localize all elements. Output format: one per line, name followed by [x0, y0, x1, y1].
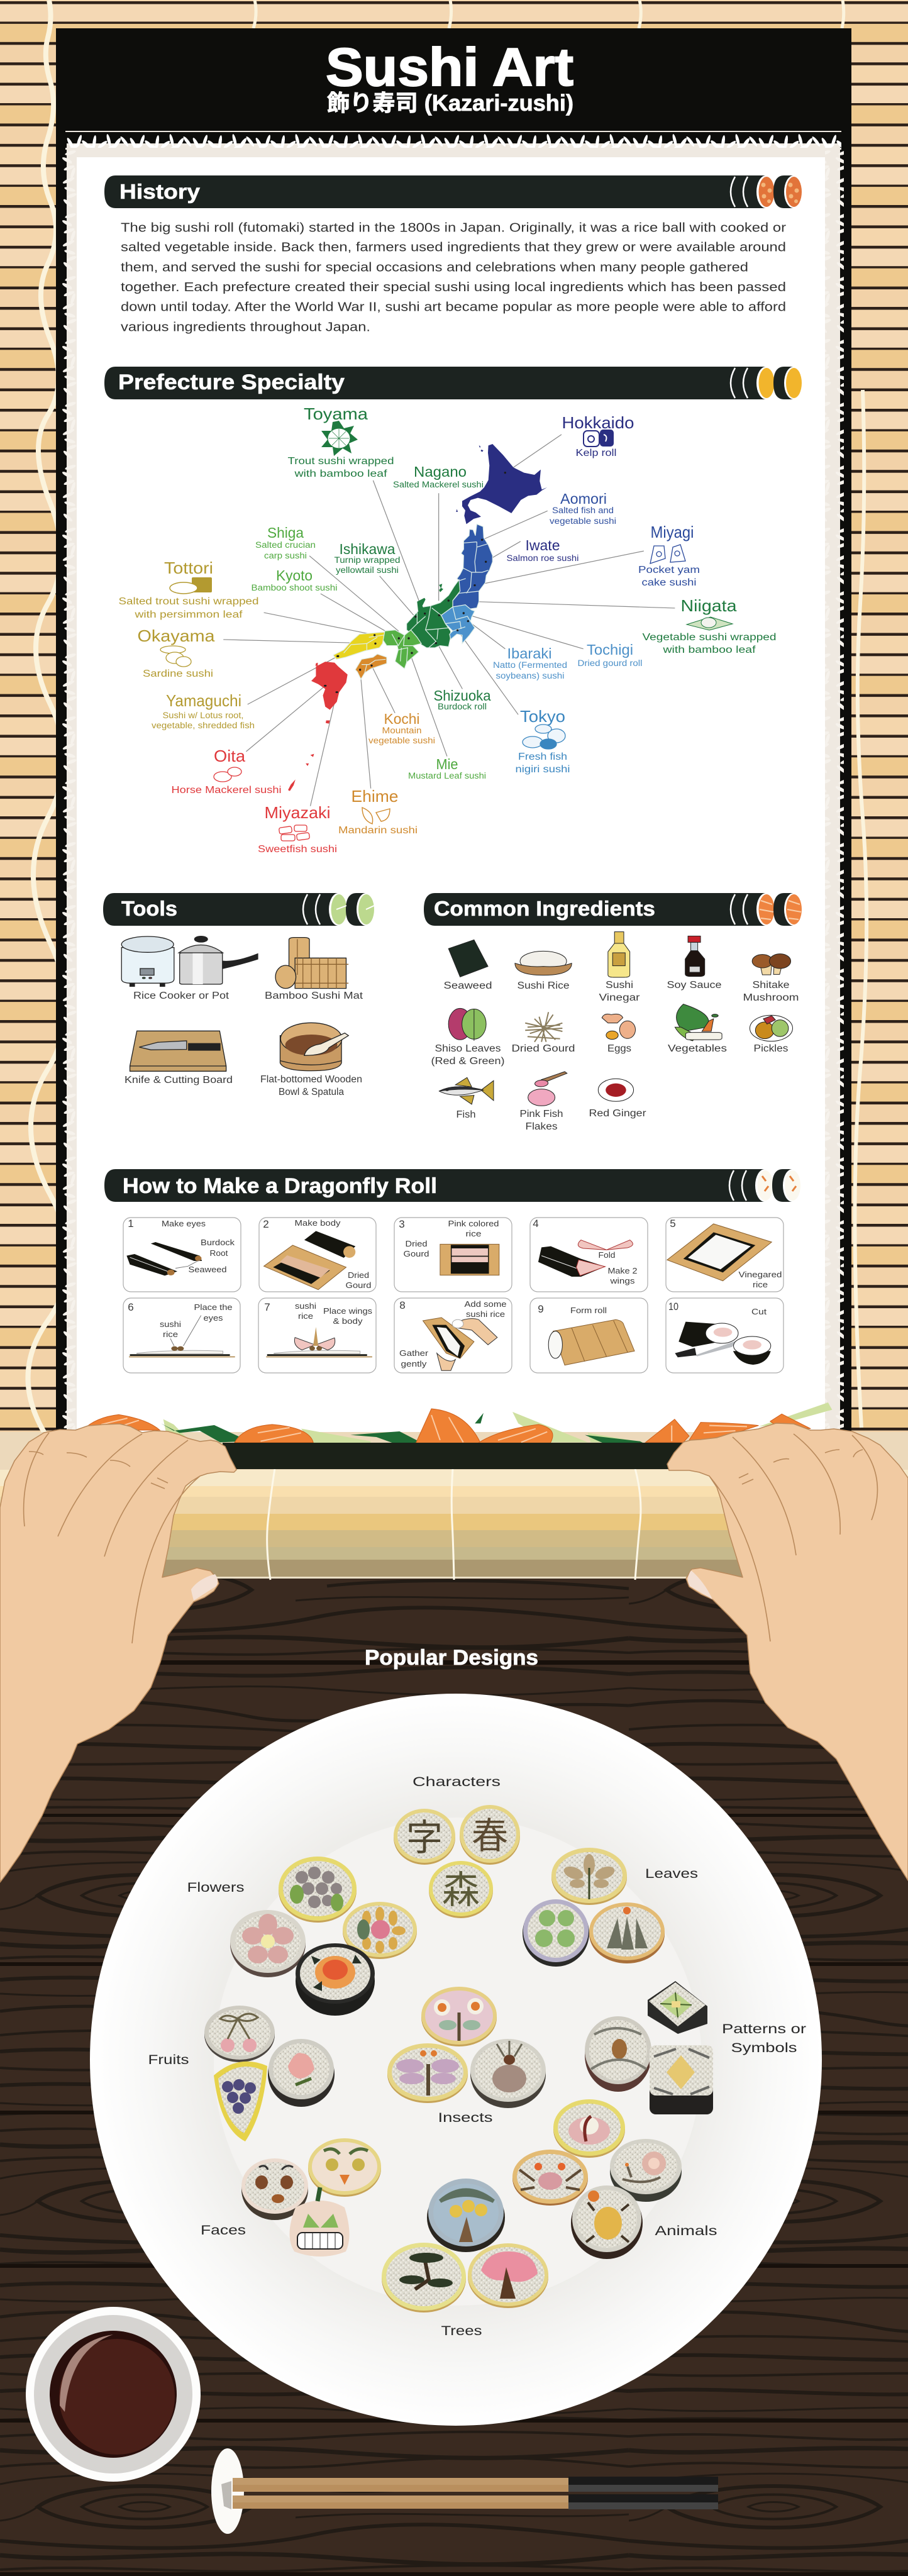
text block: ingredient labels: Soy Sauce [667, 980, 722, 991]
callout: Toyama: with bamboo leaf [294, 469, 387, 479]
callout: Ehime [338, 787, 418, 836]
sushi: characters group: 森 [442, 1860, 480, 1914]
sushi: fruits group [204, 2006, 335, 2141]
callout: Okayama: Okayama [137, 626, 215, 645]
text block: history: them, and served the sushi for special occasions and celebrations when many people gathered [121, 260, 748, 274]
callout: Shizuoka: Burdock roll [438, 702, 487, 711]
step 5: Vinegared [738, 1270, 782, 1279]
step 2: 2 [263, 1218, 269, 1230]
callout: Ibaraki: Natto (Fermented [493, 660, 567, 670]
callout: Toyama: Trout sushi wrapped [288, 456, 394, 467]
callout: Tokyo [516, 707, 570, 775]
heading: History [104, 175, 803, 208]
callout: Ishikawa: Ishikawa [340, 541, 396, 557]
step 9: 9 [538, 1303, 544, 1315]
step 6: sushi [160, 1319, 181, 1329]
step 8: sushi rice [466, 1309, 505, 1319]
text block: ingredient labels: Red Ginger [589, 1108, 646, 1119]
callout: Miyagi: cake sushi [641, 577, 697, 588]
callout: Oita: Horse Mackerel sushi [171, 785, 282, 796]
text block: ingredient labels: Shiso Leaves [435, 1043, 501, 1054]
callout: Aomori: Aomori [560, 491, 607, 507]
step 9 [530, 1298, 648, 1373]
sushi: faces group [241, 2138, 381, 2257]
callout: Okayama [137, 626, 215, 679]
callout: Ishikawa [335, 541, 400, 575]
labels: plate categories: Characters [412, 1775, 501, 1789]
step 4: Fold [599, 1250, 615, 1260]
callout: Toyama [288, 404, 394, 479]
labels: plate categories: Trees [441, 2324, 482, 2338]
text block: ingredient labels: Shitake [752, 980, 790, 991]
step 10: Cut [751, 1307, 767, 1316]
callout: Kochi: vegetable sushi [368, 736, 435, 745]
map: Japan [333, 444, 547, 679]
icon: soy sauce bottle [685, 936, 705, 977]
heading: How to Make a Dragonfly Roll [104, 1169, 802, 1202]
step 7: sushi [295, 1301, 316, 1311]
text block: ingredient labels: Eggs [607, 1043, 631, 1054]
step 4: 4 [533, 1218, 539, 1230]
text block: ingredient labels: Mushroom [743, 992, 799, 1003]
step 7: 7 [264, 1301, 270, 1313]
step 3: 3 [399, 1218, 405, 1230]
callout: Hokkaido: Hokkaido [562, 413, 634, 432]
callout: Kyoto: Bamboo shoot sushi [252, 583, 337, 592]
callout: Nagano: Nagano [414, 464, 467, 480]
callout: Miyagi: Pocket yam [638, 565, 700, 575]
labels: plate categories: Flowers [187, 1880, 244, 1895]
text block: tool labels: Bowl & Spatula [279, 1087, 344, 1097]
callout: Tottori: Salted trout sushi wrapped [118, 596, 259, 607]
callout: Shizuoka [434, 687, 491, 711]
plate [90, 1694, 822, 2426]
text block: history: salted vegetable inside. Back then, farmers used ingredients that they grew or were available around [121, 240, 786, 254]
callout: Mie [408, 756, 486, 780]
callout: Kyoto [252, 567, 337, 592]
callout: Ibaraki: Ibaraki [507, 645, 552, 662]
nori band [223, 1443, 685, 1469]
heading: Prefecture Specialty: Prefecture Specialty [118, 370, 345, 394]
step 6: rice [163, 1330, 178, 1339]
labels: plate categories: Symbols [731, 2041, 797, 2055]
heading: Common Ingredients: Common Ingredients [434, 897, 655, 920]
callout: Aomori: vegetable sushi [550, 516, 616, 526]
step 1: Make eyes [162, 1219, 206, 1228]
text block: ingredient labels: Sushi [606, 980, 633, 991]
icon: shitake mushroom [752, 954, 791, 975]
step 8: gently [401, 1359, 427, 1368]
callout: Yamaguchi: vegetable, shredded fish [152, 721, 255, 730]
chopstick rest and chopsticks [211, 2448, 718, 2534]
step 3: Pink colored [448, 1219, 499, 1228]
callout: Tokyo: Tokyo [520, 707, 565, 726]
text block: ingredient labels: Vinegar [599, 992, 640, 1003]
step 2 [259, 1218, 376, 1292]
callout: Shiga: carp sushi [264, 551, 307, 560]
callout: Okayama: Sardine sushi [143, 669, 213, 679]
callout: Kochi [368, 711, 435, 745]
icon: wooden bowl and spatula [280, 1023, 348, 1071]
callout: Miyazaki: Sweetfish sushi [258, 844, 337, 855]
labels: plate categories: Patterns or [722, 2022, 806, 2036]
step 4: wings [609, 1276, 635, 1285]
hand: right [667, 1423, 908, 1880]
callout: Toyama: Toyama [304, 404, 368, 423]
icon: eggs [602, 1014, 636, 1040]
callout: Ibaraki [493, 645, 567, 680]
step 7: & body [333, 1316, 363, 1326]
step 3: Dried [405, 1239, 428, 1248]
text block: ingredient labels: Fish [457, 1109, 475, 1120]
callout: Iwate: Salmon roe sushi [507, 553, 579, 563]
heading: Tools [103, 893, 375, 926]
panel: black nori sheet [56, 28, 851, 1432]
callout: Iwate: Iwate [526, 537, 560, 553]
sushi: leaves group [523, 1848, 665, 1967]
heading: How to Make a Dragonfly Roll: How to Make a Dragonfly Roll [123, 1174, 437, 1198]
text block: tool labels: Flat-bottomed Wooden [260, 1074, 362, 1085]
callout: Hokkaido: Kelp roll [576, 448, 616, 458]
step 2: Gourd [346, 1280, 371, 1290]
step 1: Seaweed [189, 1265, 226, 1274]
sushi: insects group [387, 1987, 546, 2108]
sushi: characters group: 春 [472, 1806, 508, 1859]
text block: history: together. Each prefecture created their special sushi using local ingredients which has been passed [121, 280, 786, 294]
step 3 [394, 1218, 512, 1292]
callout: Ehime: Ehime [351, 787, 399, 806]
text block: history: The big sushi roll (futomaki) started in the 1800s in Japan. Originally, it was a rice ball with cooked or [121, 221, 786, 235]
step 10: 10 [668, 1301, 678, 1313]
callout: Iwate [507, 537, 579, 563]
icon: red ginger [598, 1079, 634, 1101]
callout: Mie: Mie [436, 756, 458, 772]
step 8: Add some [464, 1299, 507, 1309]
step 9: Form roll [570, 1306, 607, 1315]
callout: Niigata: Vegetable sushi wrapped [643, 632, 776, 643]
rolled mat [0, 1432, 908, 1580]
callout: Shiga: Shiga [267, 525, 304, 541]
icons: ingredients [439, 932, 792, 1106]
callout: Ishikawa: yellowtail sushi [336, 565, 399, 575]
callout: Yamaguchi: Sushi w/ Lotus root, [162, 711, 244, 720]
text block: ingredient labels: Pink Fish [519, 1109, 563, 1119]
map: connector lines [223, 435, 675, 806]
step 7: Place wings [323, 1306, 373, 1316]
callout: Tottori [118, 558, 259, 620]
icon: vegetables [675, 1004, 722, 1041]
step 1: Burdock [201, 1238, 235, 1247]
icon: pot [179, 936, 258, 984]
text block: ingredient labels: Flakes [526, 1121, 558, 1132]
text block: ingredient labels: Seaweed [444, 980, 492, 991]
callout: Ishikawa: Turnip wrapped [335, 555, 400, 565]
step 4: Make 2 [607, 1266, 638, 1275]
icon: shiso leaves [448, 1008, 486, 1041]
wooden table [0, 1579, 908, 2576]
step 6: eyes [204, 1313, 223, 1323]
callout: Kyoto: Kyoto [276, 567, 313, 584]
callout: Tochigi: Dried gourd roll [577, 658, 643, 668]
callout: Miyazaki: Miyazaki [264, 803, 331, 822]
callout: Nagano [393, 464, 484, 489]
salmon and greens [83, 1402, 832, 1444]
heading: Common Ingredients [424, 893, 803, 926]
callout: Shiga [255, 525, 316, 560]
icon: bamboo mat [275, 938, 348, 989]
labels: plate categories: Insects [438, 2111, 493, 2125]
heading: Prefecture Specialty [104, 367, 803, 399]
icons: tools [121, 936, 348, 1071]
sushi: patterns group [585, 1981, 713, 2114]
hand: left [0, 1424, 236, 1882]
callout: Tokyo: nigiri sushi [516, 764, 570, 775]
callout: Aomori [550, 491, 616, 526]
callout: Yamaguchi: Yamaguchi [166, 691, 241, 710]
text block: tool labels: Bamboo Sushi Mat [265, 991, 363, 1001]
step 7 [258, 1298, 376, 1373]
labels: plate categories: Faces [201, 2223, 246, 2238]
panel: steps [123, 1218, 783, 1373]
icon: seaweed [448, 940, 488, 977]
text block: history: various ingredients throughout Japan. [121, 321, 370, 335]
labels: plate categories: Animals [655, 2224, 717, 2238]
icon: sushi rice [515, 951, 572, 975]
soy sauce dish [26, 2307, 201, 2482]
icon: rice cooker [121, 936, 174, 986]
sushi: trees group [382, 2179, 548, 2312]
callout: Nagano: Salted Mackerel sushi [393, 480, 484, 489]
text block: ingredient labels [431, 980, 799, 1132]
step 8 [394, 1298, 512, 1373]
step 1: Root [210, 1248, 228, 1258]
text block: tool labels: Rice Cooker or Pot [133, 991, 230, 1001]
callout: Miyazaki [258, 803, 337, 855]
text block: ingredient labels: Vegetables [668, 1043, 727, 1054]
labels: plate categories: Leaves [645, 1867, 698, 1881]
callout: Kochi: Kochi [384, 711, 420, 727]
sushi: characters group [394, 1805, 520, 1918]
step 2: Dried [348, 1270, 369, 1280]
labels: plate categories: Fruits [148, 2053, 189, 2067]
icon: fish [439, 1077, 494, 1104]
callout: Tottori: Tottori [164, 558, 213, 577]
icon: dried gourd [525, 1012, 562, 1042]
step 5: 5 [670, 1218, 676, 1230]
step 7: rice [298, 1311, 313, 1321]
text block: tool labels [125, 991, 363, 1097]
sushi: animals group [512, 2099, 682, 2259]
step 3: rice [465, 1229, 482, 1238]
labels: plate categories [148, 1775, 806, 2338]
icon: vinegar bottle [608, 932, 630, 977]
callout: Ibaraki: soybeans) sushi [496, 671, 565, 680]
background: bamboo mat [0, 0, 908, 1579]
step 1: 1 [128, 1218, 134, 1230]
callout: Niigata: with bamboo leaf [662, 645, 756, 655]
step 1 [123, 1218, 241, 1292]
heading: History: History [119, 180, 201, 203]
callout: Shiga: Salted crucian [255, 540, 316, 550]
panel: rice sheet [62, 131, 844, 1434]
text block: ingredient labels: (Red & Green) [431, 1056, 504, 1067]
callout: Shizuoka: Shizuoka [434, 687, 491, 704]
text block: tool labels: Knife & Cutting Board [125, 1075, 233, 1085]
callout: Hokkaido [562, 413, 634, 458]
icon: pink fish flakes [528, 1072, 567, 1106]
icon: cutting board and knife [130, 1031, 226, 1071]
text block: ingredient labels: Pickles [753, 1043, 789, 1054]
callout: Miyagi: Miyagi [650, 523, 694, 541]
text block: ingredient labels: Dried Gourd [512, 1043, 575, 1054]
callout: Yamaguchi [152, 691, 255, 730]
callout: Tochigi: Tochigi [587, 641, 633, 658]
callout: Tokyo: Fresh fish [518, 752, 567, 762]
callout: Miyagi [638, 523, 700, 588]
callout: Tochigi [577, 641, 643, 668]
callout: Kochi: Mountain [382, 726, 421, 735]
step 4 [530, 1218, 648, 1292]
callout: Aomori: Salted fish and [552, 506, 614, 515]
step 10 [666, 1298, 783, 1373]
step 6: 6 [128, 1301, 134, 1313]
step 3: Gourd [404, 1249, 429, 1258]
callout: Niigata: Niigata [680, 596, 737, 615]
title: 飾り寿司 (Kazari-zushi) [327, 90, 573, 116]
callout: Oita: Oita [214, 747, 246, 765]
step 6: Place the [194, 1302, 233, 1312]
step 6 [123, 1298, 240, 1373]
sushi: flowers group [230, 1857, 417, 2016]
callout: Tottori: with persimmon leaf [134, 609, 243, 620]
step 2: Make body [294, 1218, 341, 1228]
callouts: prefecture labels [118, 404, 776, 855]
sushi: characters group: 字 [406, 1808, 443, 1861]
heading: Tools: Tools [121, 897, 177, 920]
callout: Oita [171, 747, 282, 796]
step 5 [666, 1218, 783, 1292]
text block: history: down until today. After the World War II, sushi art became popular as more people were able to afford [121, 301, 786, 314]
text block: ingredient labels: Sushi Rice [517, 980, 570, 991]
title: Sushi Art [326, 38, 573, 97]
map: Kyushu and southern islands [288, 655, 348, 791]
heading: Popular Designs: Popular Designs [365, 1646, 538, 1670]
text block: history [121, 221, 786, 335]
icon: pickles [750, 1015, 792, 1041]
step 5: rice [753, 1280, 768, 1289]
step 8: Gather [399, 1348, 429, 1358]
step 8: 8 [399, 1299, 406, 1311]
callout: Ehime: Mandarin sushi [338, 825, 418, 836]
callout: Niigata [643, 596, 776, 655]
callout: Mie: Mustard Leaf sushi [408, 771, 486, 780]
